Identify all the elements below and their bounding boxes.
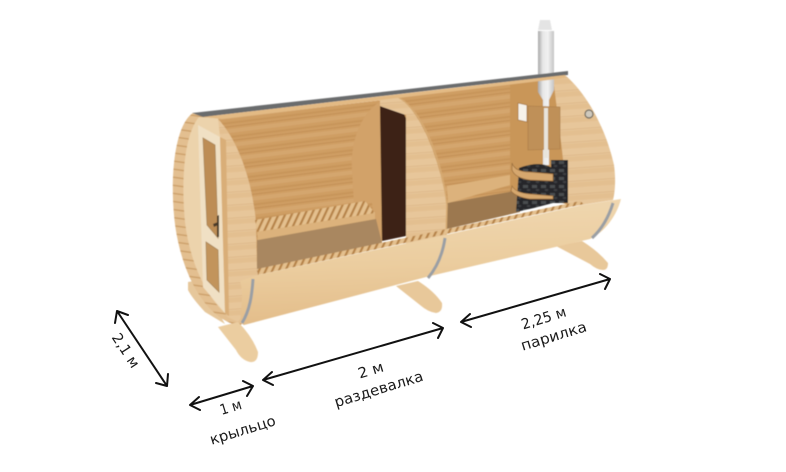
left end rim [173,113,262,326]
right metal band [592,203,613,238]
glass door to steam room [380,106,406,241]
right support leg [556,241,608,270]
right end face [553,75,615,207]
divider arch edge [396,96,447,238]
left support leg [218,322,258,362]
lower door glass [206,242,219,292]
arrow [190,381,253,410]
thermometer [585,110,593,118]
wall window [518,103,527,122]
name label: раздевалка [333,369,425,411]
front arch face [218,118,258,322]
roof covering [192,71,568,117]
divider wall arch [380,96,447,246]
changing room back wall [218,100,382,270]
bench slats [255,201,375,232]
middle metal band [428,238,445,278]
dimension: width 2,1 m [108,311,168,386]
upper wooden guard [512,163,553,181]
steam room bench [447,175,510,203]
entrance door [198,125,229,316]
arrow [115,311,168,386]
size label: 2,25 м [520,305,568,333]
shield front chimney [544,108,548,158]
steam room back wall [396,82,512,210]
chimney cap [538,20,552,30]
door panel [198,125,225,313]
rear stones [551,160,568,203]
dimension: steam room 2,25 m [461,274,610,355]
stove stones [516,164,553,212]
changing room bench [255,201,375,240]
size label: 1 м [218,397,244,419]
changing room floor [257,219,382,272]
stove chimney [538,31,554,165]
roof wooden edge [203,75,565,119]
arrow [461,274,610,327]
label: 2,1 м [108,331,142,371]
sauna barrel illustration [173,20,621,362]
changing room side wall [352,101,382,240]
name label: парилка [519,319,589,355]
dimension: porch 1 m [190,381,278,449]
door handle [213,215,219,237]
heat shield [528,106,560,150]
steam room side wall [510,77,570,205]
name label: крыльцо [208,413,278,449]
sauna stove [511,20,568,212]
lower barrel shell [240,199,621,325]
middle support leg [396,281,442,313]
lower wooden guard [511,186,553,199]
floor slats strip [257,201,584,275]
dimension: changing room 2 m [263,323,443,411]
size label: 2 м [356,360,386,382]
left foot block [188,280,225,324]
bench front [257,213,375,240]
door frame strip [220,137,229,316]
upper door glass [203,138,218,238]
left metal band [242,279,253,323]
arrow [263,323,443,385]
left end face [183,117,258,322]
steam room floor [447,190,520,229]
